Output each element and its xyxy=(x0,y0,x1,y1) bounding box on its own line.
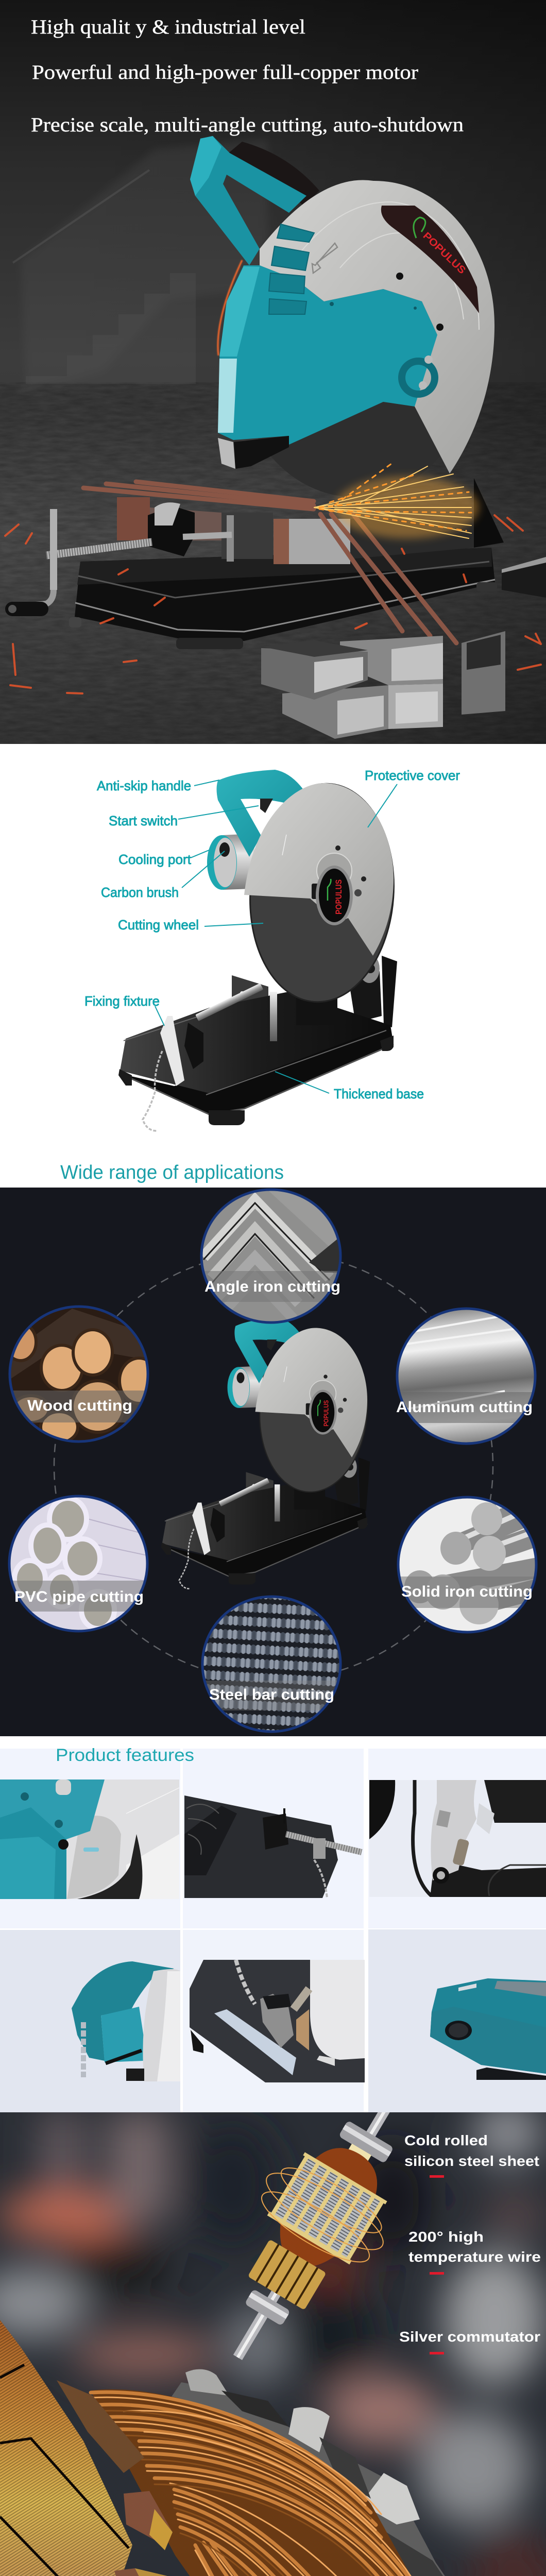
illustration: central machine: POPULUS xyxy=(322,1400,330,1427)
callouts: motor feature labels: silicon steel sheet xyxy=(404,2153,539,2169)
callouts: motor feature labels xyxy=(399,2132,541,2354)
panel: labelled machine diagram xyxy=(60,768,460,1183)
application: steel bar xyxy=(198,1592,345,1736)
callouts: part labels: Protective cover xyxy=(365,768,460,783)
illustration: commutator segments and brushes xyxy=(0,2320,173,2576)
background: blurred workshop xyxy=(0,2102,546,2576)
panel: product features xyxy=(0,1745,546,2112)
illustration: copper windings xyxy=(91,2389,431,2576)
panel: hero with cut-off machine xyxy=(0,0,546,744)
tile: base plate and chain xyxy=(190,1959,365,2082)
application: aluminum xyxy=(396,1308,537,1445)
callouts: motor feature labels: temperature wire xyxy=(408,2249,541,2265)
heading: hero text lines: Precise scale, multi-angle cutting, auto-shutdown xyxy=(31,114,464,136)
callouts: motor feature labels: Silver commutator xyxy=(399,2329,540,2345)
callouts: part labels: Carbon brush xyxy=(101,885,179,900)
illustration: cut steel tubes xyxy=(261,557,546,739)
application: solid iron: Solid iron cutting xyxy=(401,1583,533,1600)
illustration: hero machine: POPULUS xyxy=(421,230,468,276)
illustration: stator housing xyxy=(172,2369,445,2576)
callouts: part labels xyxy=(84,768,460,1101)
application: wood xyxy=(5,1303,159,1443)
tile: motor housing close-up xyxy=(0,1780,179,1899)
panel: motor internals xyxy=(0,2075,546,2576)
illustration: machine xyxy=(118,770,401,1131)
application: solid iron xyxy=(397,1493,546,1633)
application: PVC pipe xyxy=(8,1494,152,1633)
application: steel bar: Steel bar cutting xyxy=(209,1686,334,1703)
application: aluminum: Aluminum cutting xyxy=(396,1399,533,1416)
heading: hero text lines xyxy=(31,16,464,136)
illustration: central machine xyxy=(161,1318,373,1589)
application: PVC pipe: PVC pipe cutting xyxy=(14,1588,144,1605)
heading: hero text lines: Powerful and high-power full-copper motor xyxy=(32,61,418,83)
tile: handle with chain xyxy=(72,1961,180,2081)
callouts: part labels: Fixing fixture xyxy=(84,993,160,1009)
heading: hero text lines: High qualit y & industrial level xyxy=(31,16,305,38)
callouts: part labels: Thickened base xyxy=(334,1086,424,1101)
callouts: motor feature labels: Cold rolled xyxy=(404,2132,488,2148)
callouts: part labels: Anti-skip handle xyxy=(97,778,191,793)
callouts: motor feature labels: 200° high xyxy=(408,2229,484,2245)
heading: product features: Product features xyxy=(56,1745,194,1765)
application: angle iron xyxy=(200,1188,342,1324)
callouts: part labels: Start switch xyxy=(109,813,178,828)
illustration: sparks xyxy=(5,464,541,693)
application: angle iron: Angle iron cutting xyxy=(204,1278,340,1295)
tile: motor end cap xyxy=(430,1978,546,2080)
application: wood: Wood cutting xyxy=(27,1397,132,1414)
illustration: hero machine xyxy=(5,136,504,649)
heading: wide range of applications: Wide range of applications xyxy=(60,1162,284,1183)
tile: clamp and screw on base xyxy=(184,1795,362,1898)
callouts: part labels: Cutting wheel xyxy=(118,917,199,933)
illustration: armature xyxy=(233,2112,393,2360)
callouts: part labels: Cooling port xyxy=(118,852,192,867)
panel: applications xyxy=(0,1185,546,1736)
illustration: machine: POPULUS xyxy=(334,879,344,914)
tile: spring and pivot arm xyxy=(369,1780,546,1897)
leader lines xyxy=(155,780,397,1093)
